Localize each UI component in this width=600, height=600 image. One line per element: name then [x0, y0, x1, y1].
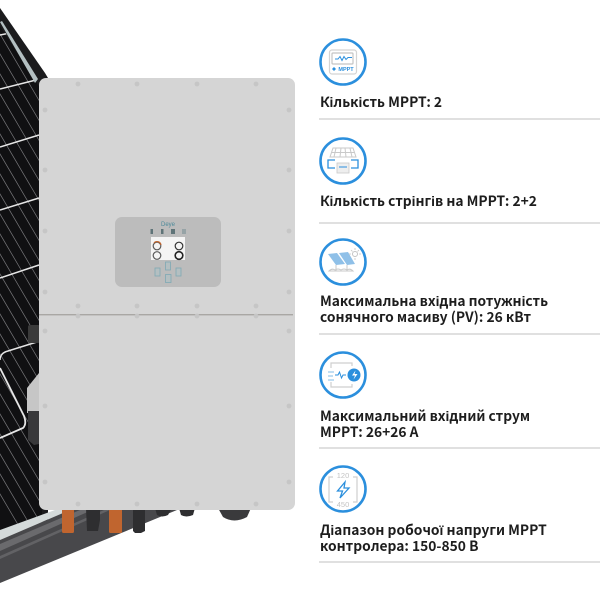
text: MPPT voltage range: Діапазон робочої напруги MPPT: [320, 519, 547, 539]
icon: MPPT monitor: MPPT: [338, 67, 354, 73]
text: MPPT voltage range: контролера: 150-850 В: [320, 534, 478, 554]
text: strings per MPPT: Кількість стрінгів на MPPT: 2+2: [320, 190, 537, 210]
text: number of MPPT: Кількість MPPT: 2: [320, 91, 442, 111]
icon: voltage range: [320, 466, 366, 512]
control buttons: [155, 262, 181, 282]
icon: voltage range: 450: [337, 500, 349, 509]
text: maximum input current: Максимальний вхідний струм: [320, 405, 530, 425]
icon: MPPT monitor: [320, 40, 366, 84]
brand logo: Deye: [161, 222, 176, 228]
inverter body: [39, 78, 295, 510]
icon: PV array: [320, 240, 366, 284]
text: maximum PV power: сонячного масиву (PV): 26 кВт: [320, 306, 531, 326]
text: maximum PV power: Максимальна вхідна потужність: [320, 290, 548, 310]
text: maximum PV power: [320, 290, 548, 326]
cable connectors: [62, 508, 251, 533]
text: maximum input current: MPPT: 26+26 А: [320, 420, 419, 440]
control panel: [115, 217, 221, 287]
status indicators: [150, 229, 186, 234]
icon: voltage range: 120: [337, 471, 349, 480]
mounting bracket: [27, 325, 40, 445]
icon: input current: [320, 352, 366, 398]
text: MPPT voltage range: [320, 519, 547, 554]
text: maximum input current: [320, 405, 530, 440]
display screen: [151, 237, 185, 260]
mounting screws: [43, 82, 291, 506]
icon: solar strings: [320, 138, 366, 184]
solar panel: [0, 0, 177, 596]
